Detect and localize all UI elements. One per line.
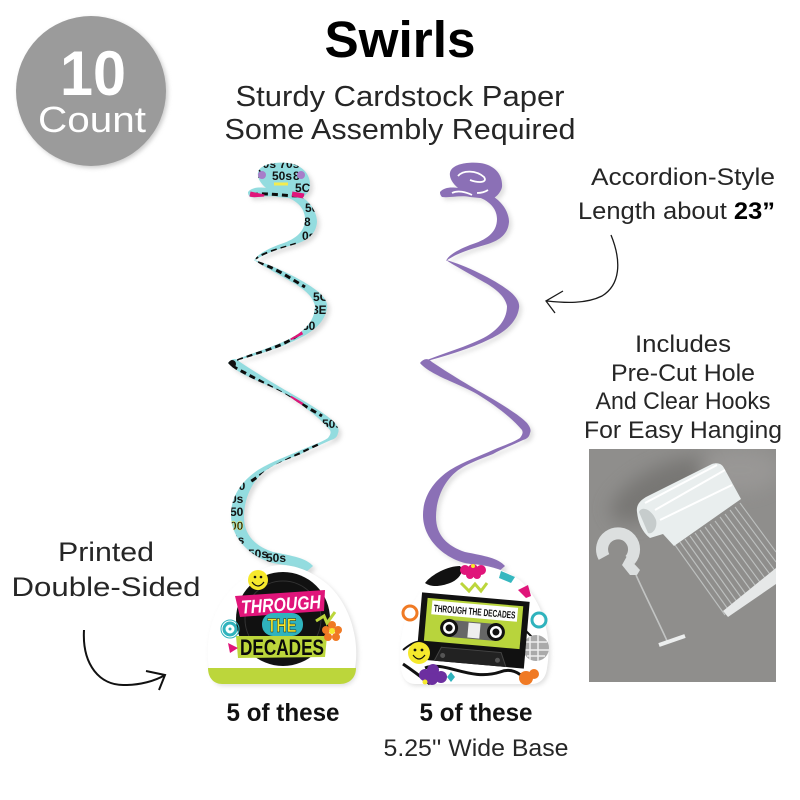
label: includes hooks — [584, 331, 782, 444]
arrow: to tag — [84, 630, 165, 690]
photo: clear hooks — [589, 445, 780, 682]
swirl inner curl — [452, 172, 488, 195]
pattern text: 8E — [312, 303, 327, 317]
label: accordion style — [578, 164, 775, 225]
tag: through the decades: DECADES — [240, 635, 324, 660]
pattern text: 50s 70s 50 — [256, 157, 316, 171]
caption: base width: 5.25'' Wide Base — [384, 735, 568, 762]
label: includes hooks: Pre-Cut Hole — [611, 360, 755, 387]
label: includes hooks: And Clear Hooks — [596, 388, 770, 415]
label: accordion style: Accordion-Style — [591, 164, 775, 191]
roll — [637, 463, 741, 546]
comb base — [723, 568, 776, 617]
subtitle: Sturdy Cardstock Paper — [236, 81, 565, 113]
disco ball — [523, 635, 549, 661]
pattern text: 50 — [302, 319, 316, 333]
pink flower — [460, 564, 486, 579]
pattern text: 50s — [322, 417, 342, 431]
pattern text: 5C — [295, 181, 311, 195]
pattern text: 50s — [272, 169, 292, 183]
zigzag — [316, 612, 335, 623]
tag: cassette — [400, 564, 551, 686]
title: Swirls — [324, 11, 476, 68]
pattern text: 5s — [231, 533, 245, 547]
pattern text: 50 — [305, 201, 319, 215]
pattern text: 0s — [302, 229, 316, 243]
label: printed double sided: Printed — [58, 537, 154, 567]
caption: right tag: 5 of these — [420, 699, 533, 727]
pattern text: 5C — [313, 290, 329, 304]
arrow: to swirl — [546, 235, 618, 313]
background decor — [425, 566, 462, 586]
pattern text: 8 — [293, 169, 300, 183]
swirl: solid purple right — [420, 163, 534, 575]
tag: through the decades: THE — [268, 616, 296, 637]
teal and orange spirals — [532, 613, 546, 627]
swirl: patterned left — [220, 155, 345, 575]
pattern marks — [232, 194, 322, 482]
teal pill — [262, 613, 303, 636]
label: includes hooks: Includes — [635, 331, 731, 358]
label: includes hooks: For Easy Hanging — [584, 417, 782, 444]
cassette — [416, 592, 530, 669]
pattern text: 50s — [266, 551, 286, 565]
pattern text: 0s — [230, 492, 244, 506]
label: printed double sided: Double-Sided — [12, 572, 200, 602]
pattern text: 8 — [304, 215, 311, 229]
pattern text: 5 — [316, 429, 323, 443]
badge: 10 count: 10 — [60, 39, 126, 109]
pattern text: 50s — [248, 547, 268, 561]
vinyl record — [236, 572, 330, 666]
pattern text: 0 — [255, 167, 262, 181]
cassette: THROUGH THE DECADES — [433, 604, 516, 622]
smiley — [408, 642, 430, 664]
subtitle: Some Assembly Required — [224, 114, 576, 146]
pattern text — [230, 157, 342, 565]
tag: through the decades — [208, 565, 358, 686]
lime zigzag — [461, 583, 487, 591]
subtitle — [224, 81, 576, 146]
pink triangle — [228, 643, 238, 653]
badge: 10 count — [16, 16, 168, 168]
label: printed double sided — [12, 537, 200, 602]
badge: 10 count: Count — [38, 99, 146, 140]
pink banner — [235, 590, 325, 617]
smiley — [248, 570, 268, 590]
pattern text: 00 — [232, 479, 246, 493]
label: accordion style: Length about 23” — [578, 198, 775, 225]
pattern text: 00 — [230, 519, 244, 533]
caption: left tag: 5 of these — [226, 699, 340, 727]
pattern text: 50 — [230, 505, 244, 519]
green label — [236, 636, 327, 658]
tag: through the decades: THROUGH — [240, 592, 323, 619]
teal spiral — [224, 623, 236, 635]
hook — [602, 533, 634, 560]
flower — [322, 621, 342, 641]
purple and orange flowers — [419, 664, 447, 685]
filaments — [675, 503, 776, 615]
